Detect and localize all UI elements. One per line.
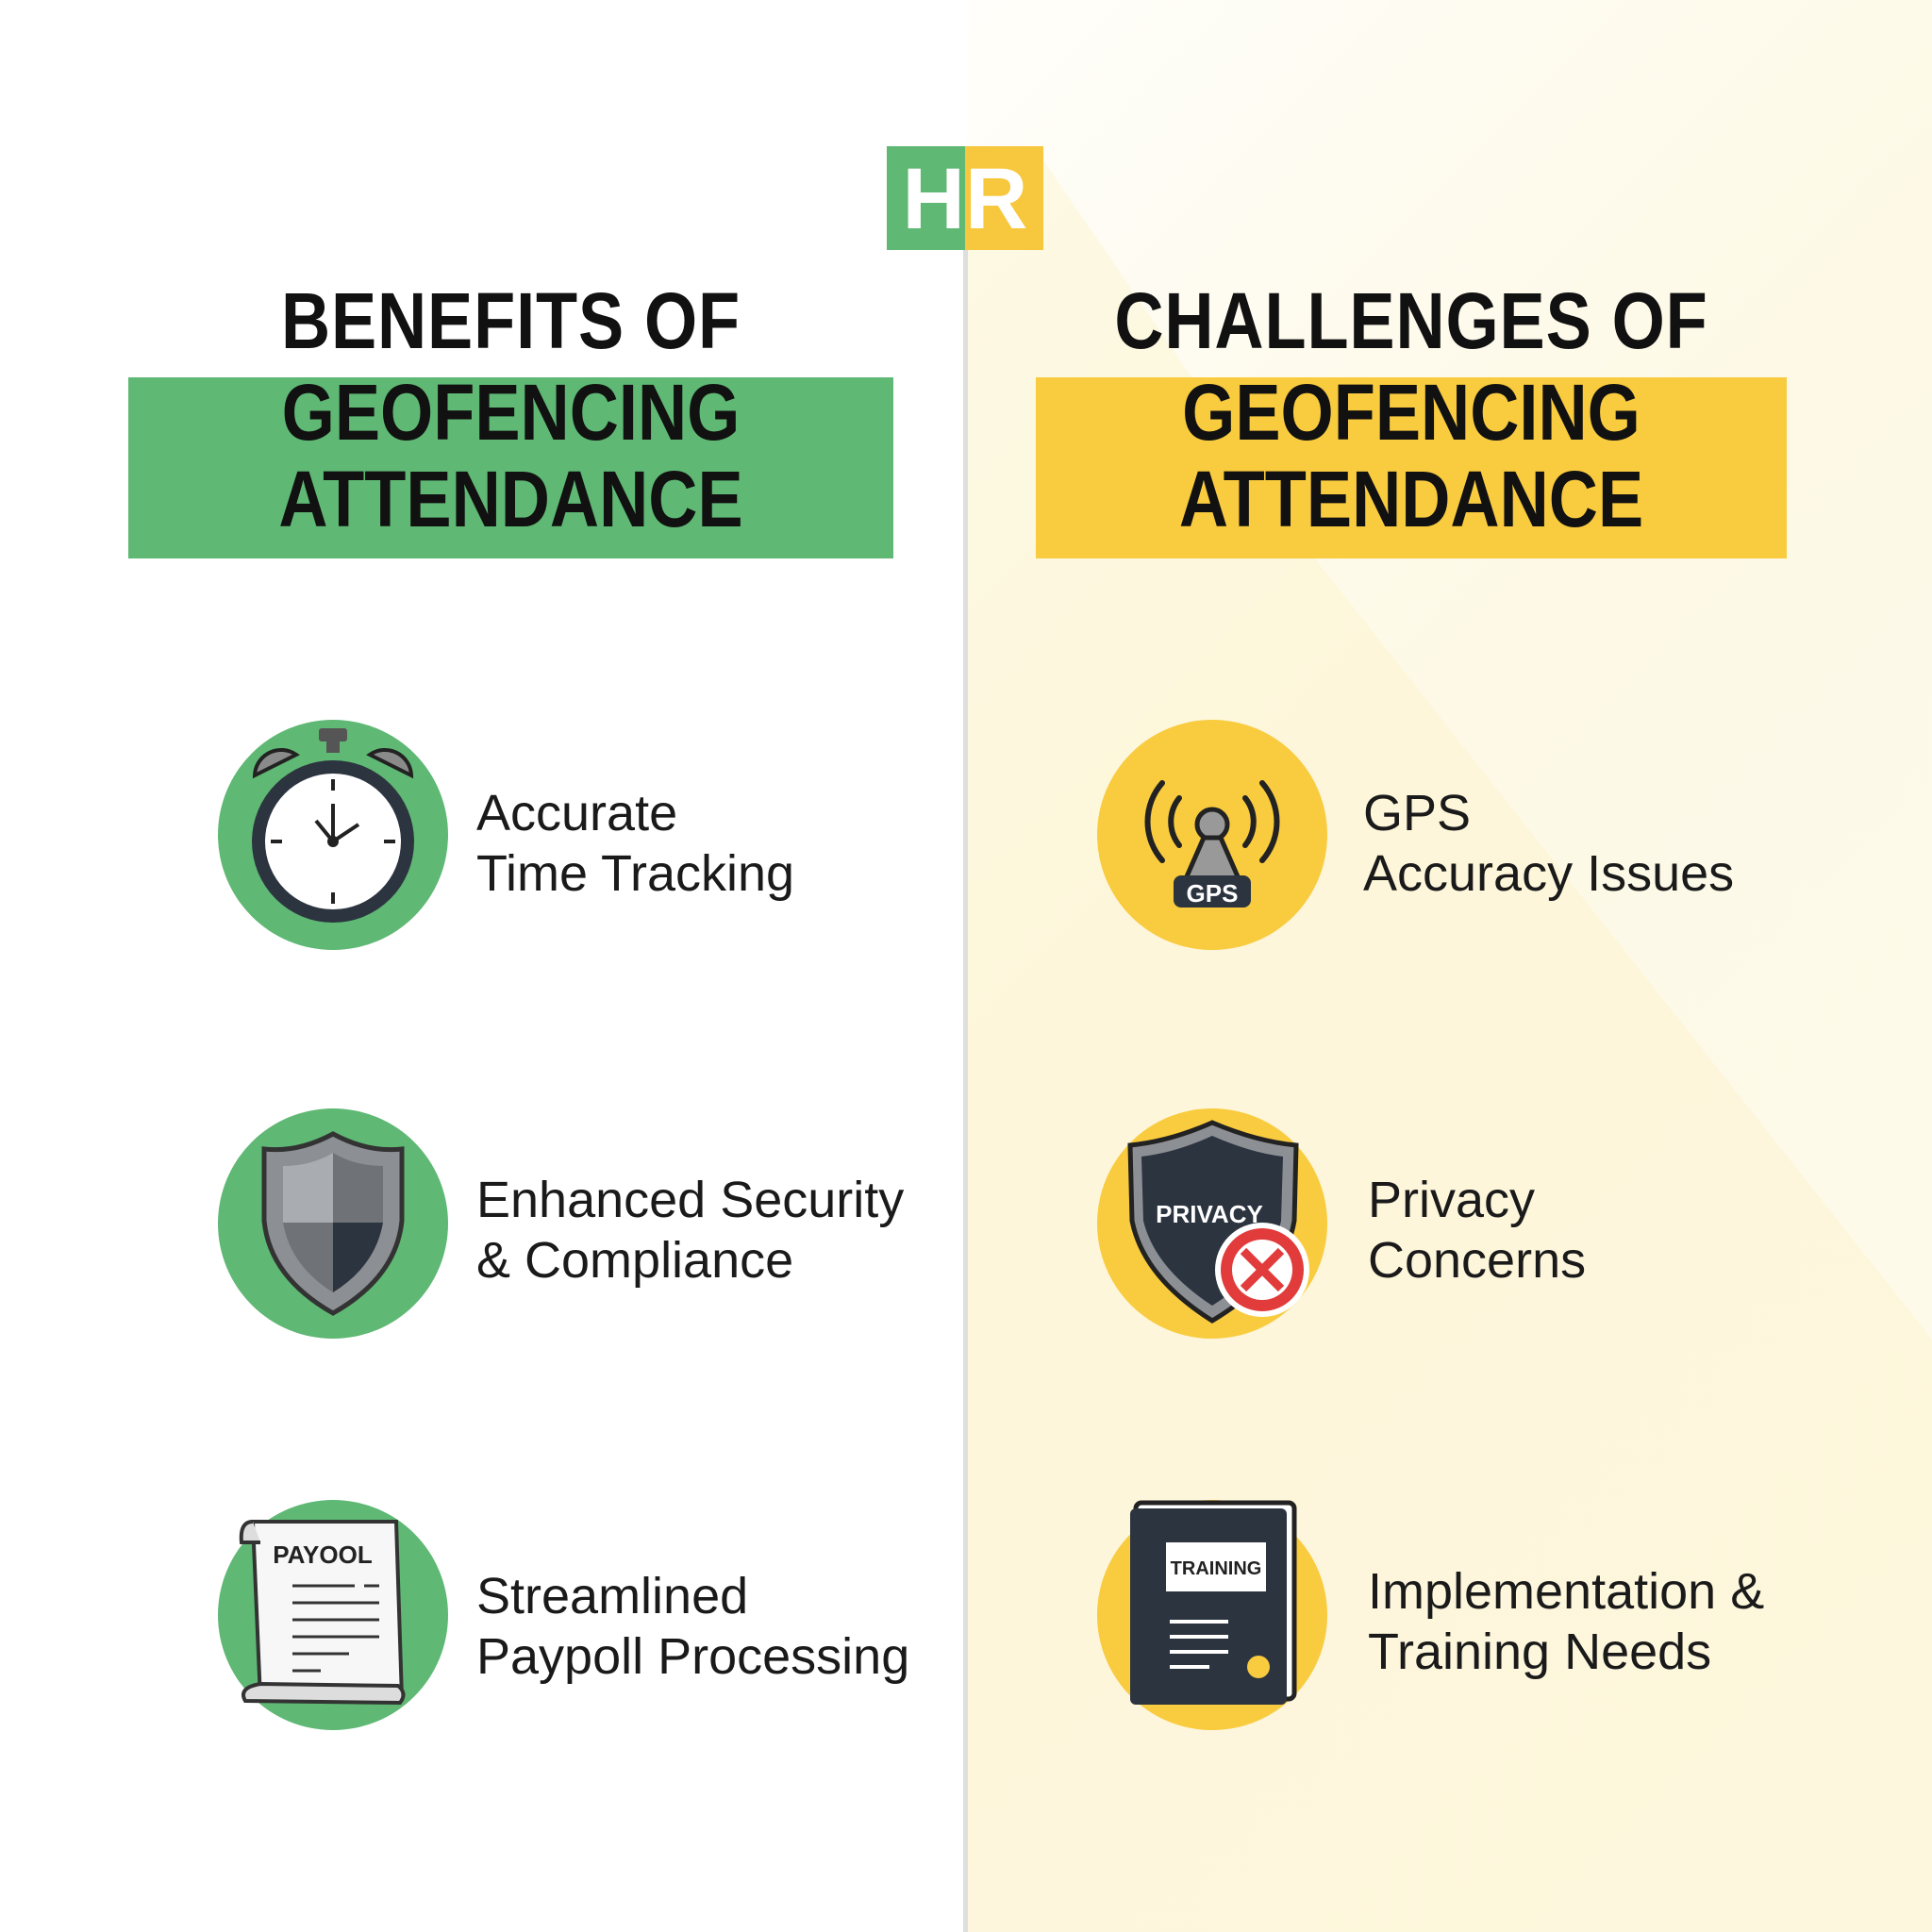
- text: accurate time tracking: [476, 785, 794, 902]
- heading: challenges: CHALLENGES OF: [1114, 276, 1708, 365]
- text: enhanced security: & Compliance: [476, 1232, 793, 1289]
- text: implementation: Training Needs: [1368, 1624, 1711, 1680]
- text: GPS accuracy: GPS: [1363, 785, 1471, 841]
- text: privacy concerns: Concerns: [1368, 1232, 1586, 1289]
- icon: shield: [218, 1108, 448, 1339]
- heading box: yellow: [1036, 377, 1787, 558]
- icon: training book: [1097, 1500, 1327, 1730]
- icon: privacy shield: [1097, 1108, 1327, 1339]
- text: GPS accuracy: [1363, 785, 1734, 902]
- heading box: yellow: ATTENDANCE: [1179, 455, 1643, 543]
- text: streamlined payroll: [476, 1568, 909, 1685]
- icon: training book: TRAINING: [1171, 1558, 1261, 1579]
- text: accurate time tracking: Accurate: [476, 785, 677, 841]
- heading box: green: GEOFENCING: [282, 368, 740, 457]
- text: privacy concerns: Privacy: [1368, 1172, 1535, 1228]
- text: enhanced security: Enhanced Security: [476, 1172, 904, 1228]
- heading box: yellow: GEOFENCING: [1182, 368, 1641, 457]
- text: implementation: [1368, 1563, 1764, 1680]
- heading box: green: ATTENDANCE: [278, 455, 743, 543]
- text: accurate time tracking: Time Tracking: [476, 845, 794, 902]
- text: GPS accuracy: Accuracy Issues: [1363, 845, 1734, 902]
- icon: stopwatch: [218, 720, 448, 950]
- heading box: green: [128, 377, 893, 558]
- icon: payroll scroll: PAYOOL: [273, 1541, 373, 1569]
- text: streamlined payroll: Paypoll Processing: [476, 1628, 909, 1685]
- icon: privacy shield: PRIVACY: [1156, 1200, 1263, 1228]
- icon: GPS: [1097, 720, 1327, 950]
- icon: payroll scroll: [218, 1500, 448, 1730]
- text: enhanced security: [476, 1172, 904, 1289]
- background: right yellow panel: [967, 0, 1932, 1932]
- text: streamlined payroll: Streamlined: [476, 1568, 748, 1624]
- icon: GPS: GPS: [1187, 879, 1238, 908]
- text: privacy concerns: [1368, 1172, 1586, 1289]
- text: implementation: Implementation &: [1368, 1563, 1764, 1620]
- HR logo: HR: [903, 151, 1027, 247]
- heading: benefits: BENEFITS OF: [281, 276, 741, 365]
- divider line: [963, 245, 968, 1932]
